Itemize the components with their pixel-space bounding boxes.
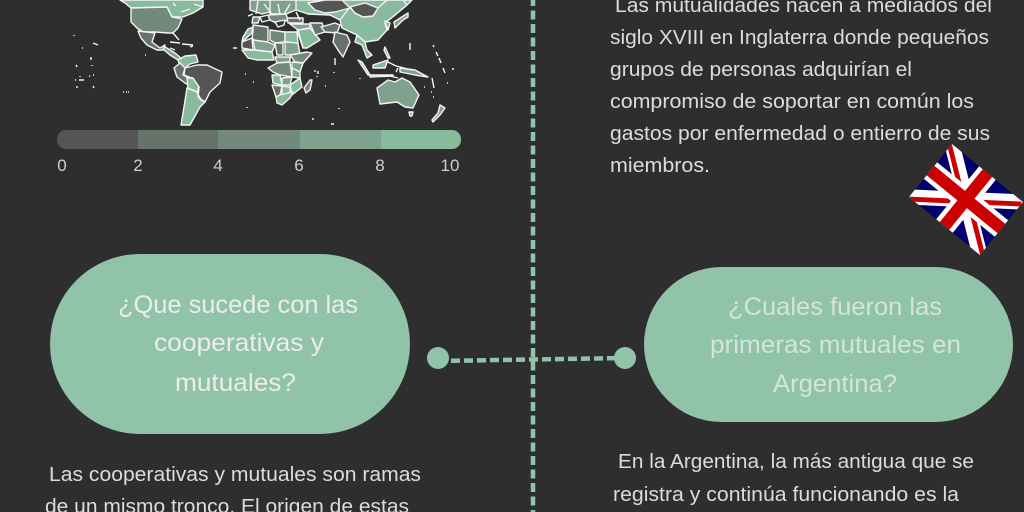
legend color bar (57, 130, 461, 149)
connector dot right (614, 347, 636, 369)
heading pill: primeras mutuales en Argentina: Argentina? (773, 370, 897, 398)
legend labels: 6 (294, 156, 304, 175)
map: Asia (308, 0, 428, 78)
heading pill: primeras mutuales en Argentina: ¿Cuales fueron las (728, 293, 942, 321)
vertical dashed timeline (531, 0, 535, 512)
heading pill: primeras mutuales en Argentina (644, 267, 1013, 422)
text block: origen de las mutualidades (610, 0, 992, 177)
legend labels: 4 (213, 156, 223, 175)
heading pill: cooperativas y mutuales: ¿Que sucede con las (118, 291, 358, 319)
text block: origen de las mutualidades: siglo XVIII en Inglaterra donde pequeños (610, 27, 989, 49)
text block: cooperativas y mutuales (45, 464, 421, 512)
map: scattered islands (74, 35, 454, 124)
legend labels: 2 (133, 156, 143, 175)
map: Europe and Middle East (248, 0, 325, 48)
text block: origen de las mutualidades: grupos de personas adquirían el (610, 59, 912, 81)
heading pill: primeras mutuales en Argentina: primeras mutuales en (710, 331, 961, 359)
icon: UK flag (906, 143, 1024, 258)
connector dot left (427, 347, 449, 369)
text block: cooperativas y mutuales: Las cooperativas y mutuales son ramas (49, 464, 421, 486)
map: Africa (242, 25, 312, 105)
text block: primeras mutuales en Argentina: En la Argentina, la más antigua que se (618, 451, 974, 473)
text block: origen de las mutualidades: compromiso de soportar en común los (610, 91, 974, 113)
legend labels: 8 (375, 156, 385, 175)
heading pill: cooperativas y mutuales: cooperativas y (154, 329, 325, 357)
legend labels: 0 (57, 156, 67, 175)
text block: primeras mutuales en Argentina: registra y continúa funcionando es la (613, 484, 960, 506)
heading pill: cooperativas y mutuales (50, 254, 410, 434)
legend labels (57, 156, 459, 175)
text block: origen de las mutualidades: miembros. (610, 155, 710, 177)
map: Australia and New Zealand (377, 78, 445, 122)
text block: origen de las mutualidades: gastos por enfermedad o entierro de sus (610, 123, 990, 145)
map: South America (174, 55, 222, 125)
map: North America (120, 0, 203, 60)
heading pill: cooperativas y mutuales: mutuales? (175, 369, 296, 397)
horizontal dashed connector (438, 358, 625, 361)
world map (74, 0, 454, 125)
text block: primeras mutuales en Argentina (613, 451, 974, 506)
legend labels: 10 (441, 156, 459, 175)
map: Russia (272, 0, 412, 23)
